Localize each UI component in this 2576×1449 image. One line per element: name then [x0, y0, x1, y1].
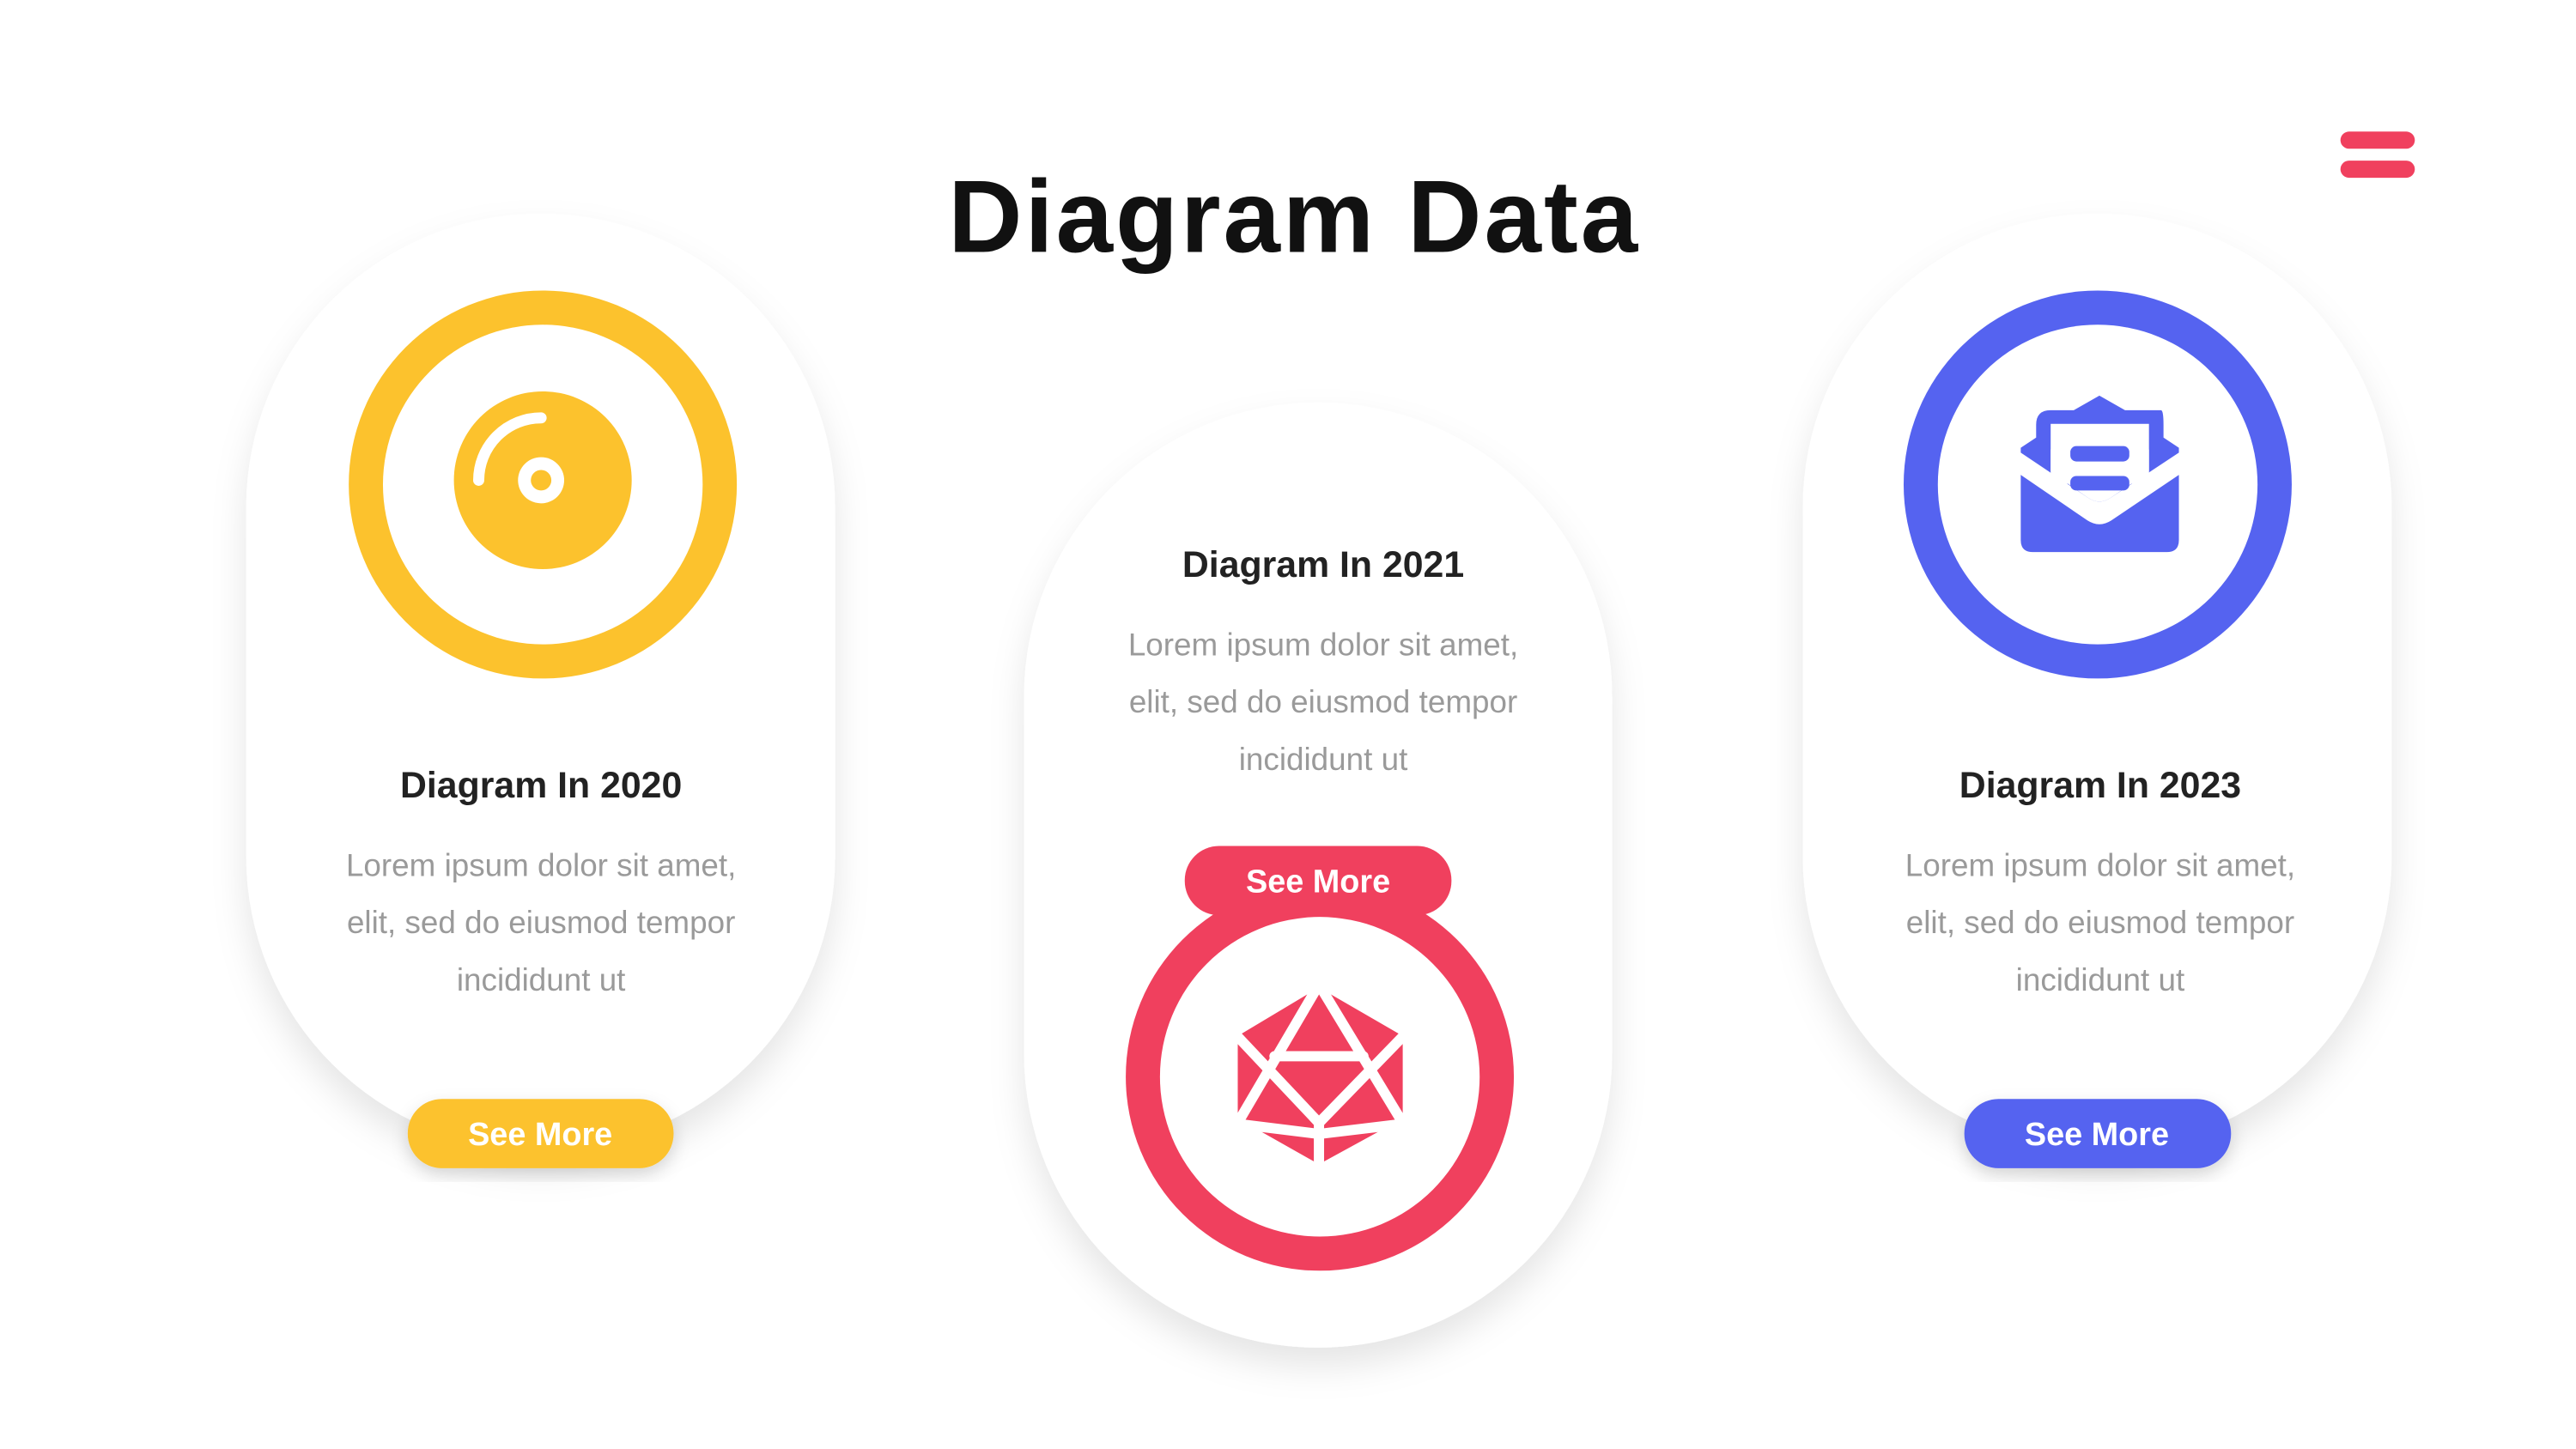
- body text: 2021: [1128, 627, 1518, 777]
- icon: dice ring: [1126, 882, 1514, 1270]
- body text: 2023: incididunt ut: [2016, 962, 2184, 997]
- body text: 2021: Lorem ipsum dolor sit amet,: [1128, 627, 1518, 663]
- body text: 2023: Lorem ipsum dolor sit amet,: [1905, 847, 2295, 882]
- body text: 2020: [346, 847, 736, 997]
- icon: disc ring: [349, 290, 737, 678]
- heading: 2020: Diagram In 2020: [400, 765, 682, 806]
- body text: 2020: elit, sed do eiusmod tempor: [347, 905, 735, 940]
- heading: 2023: Diagram In 2023: [1959, 765, 2241, 806]
- body text: 2021: incididunt ut: [1239, 742, 1407, 777]
- panel: 2021: [1024, 403, 1613, 1348]
- button: 2023: See More: [2025, 1117, 2169, 1153]
- button: 2020: See More: [468, 1117, 612, 1153]
- body text: 2023: [1905, 847, 2295, 997]
- body text: 2021: elit, sed do eiusmod tempor: [1129, 684, 1517, 719]
- button: 2021: [1185, 846, 1451, 915]
- button: 2020: [408, 1099, 673, 1168]
- button: 2021: See More: [1246, 864, 1390, 900]
- body text: 2023: elit, sed do eiusmod tempor: [1906, 905, 2294, 940]
- body text: 2020: Lorem ipsum dolor sit amet,: [346, 847, 736, 882]
- panel: 2023: [1803, 214, 2391, 1168]
- content: [246, 131, 2415, 1348]
- panel: 2020: [246, 214, 835, 1168]
- heading: 2021: Diagram In 2021: [1182, 544, 1464, 585]
- button: 2023: [1965, 1099, 2231, 1168]
- body text: 2020: incididunt ut: [457, 962, 625, 997]
- icon: envelope ring: [1904, 290, 2292, 678]
- icon: menu: [2341, 131, 2415, 178]
- title: Diagram Data: [948, 161, 1640, 275]
